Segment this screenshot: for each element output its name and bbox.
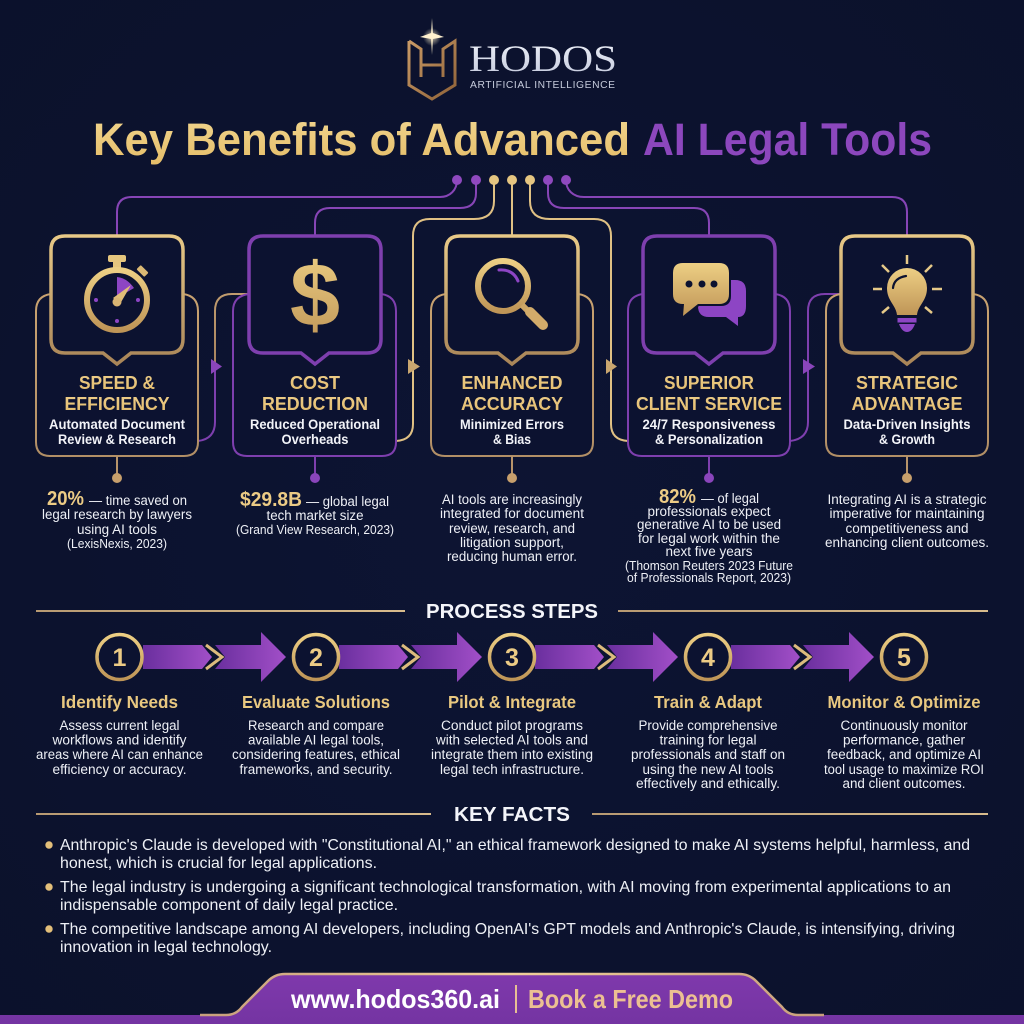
text block: strategic description — [825, 492, 989, 550]
step 1: identify needs: Assess current legal — [60, 718, 180, 733]
icon: shield with star — [409, 18, 455, 99]
fact 1: Anthropic's Claude is developed with "Constitutional AI," an ethical framework designed to make AI systems helpful, harmless, and — [60, 837, 970, 854]
card title: REDUCTION — [262, 393, 368, 414]
arrow: step 4 to 5 — [731, 632, 874, 682]
step 4: train and adapt: effectively and ethically. — [636, 776, 780, 791]
card title — [636, 372, 782, 414]
panel: superior client service — [628, 236, 790, 483]
arrow: step 1 to 2 — [143, 632, 286, 682]
text block: accuracy description: reducing human error. — [447, 549, 577, 564]
footer url: www.hodos360.ai — [290, 984, 500, 1014]
card subtitle: & Bias — [493, 432, 531, 447]
text block: 20% stat: using AI tools — [77, 522, 157, 537]
panel: cost reduction — [233, 236, 396, 483]
step 3: pilot and integrate: integrate them into existing — [431, 747, 593, 762]
step 2: evaluate solutions: frameworks, and security. — [240, 762, 392, 777]
panel: speed and efficiency — [36, 236, 198, 483]
text block: $29.8B stat: (Grand View Research, 2023) — [236, 522, 394, 537]
step 1: identify needs — [36, 634, 203, 777]
card subtitle: 24/7 Responsiveness — [642, 417, 776, 432]
icon: light bulb — [873, 255, 942, 332]
step 4: train and adapt: using the new AI tools — [642, 762, 774, 777]
text block: 20% stat: (LexisNexis, 2023) — [67, 536, 167, 551]
card subtitle: Data-Driven Insights — [844, 417, 970, 432]
text block: 82% stat: next five years — [666, 544, 753, 559]
logo wordmark: HODOS — [469, 39, 617, 80]
text block: strategic description: imperative for maintaining — [830, 506, 984, 521]
text block: 20% stat: — time saved on — [89, 493, 187, 508]
step 1: identify needs: efficiency or accuracy. — [52, 762, 186, 777]
text block: accuracy description — [440, 492, 584, 564]
text block: $29.8B stat — [236, 489, 394, 537]
step 5: monitor and optimize: feedback, and optimize AI — [827, 747, 981, 762]
step 5: monitor and optimize: tool usage to maximize ROI — [824, 762, 984, 777]
step 3: pilot and integrate — [431, 634, 593, 777]
step 2: evaluate solutions: Research and compare — [248, 718, 384, 733]
text block: 20% stat: legal research by lawyers — [42, 507, 192, 522]
step 3: pilot and integrate: with selected AI tools and — [435, 732, 588, 748]
card subtitle: Reduced Operational — [250, 417, 380, 432]
text block: 82% stat: 82% — [659, 486, 696, 508]
footer banner — [0, 974, 1024, 1024]
text block: $29.8B stat: $29.8B — [240, 489, 302, 511]
fact 3: innovation in legal technology. — [60, 939, 272, 956]
step 5: monitor and optimize: and client outcomes. — [842, 776, 966, 791]
process arrows — [143, 632, 874, 682]
title: AI Legal Tools — [643, 114, 932, 165]
card title: CLIENT SERVICE — [636, 393, 782, 414]
heading: key facts: KEY FACTS — [454, 803, 570, 826]
fact 2: indispensable component of daily legal practice. — [60, 897, 398, 914]
text block: accuracy description: AI tools are increasingly — [442, 492, 582, 507]
step 4: train and adapt: Provide comprehensive — [638, 718, 778, 733]
text block: accuracy description: litigation support, — [460, 535, 564, 550]
step 2: evaluate solutions: Evaluate Solutions — [242, 692, 390, 712]
text block: strategic description: Integrating AI is a strategic — [828, 492, 987, 507]
step 5: monitor and optimize: 5 — [897, 644, 911, 672]
card title: ACCURACY — [461, 393, 564, 414]
step 3: pilot and integrate: 3 — [505, 644, 519, 672]
icon: stopwatch — [87, 255, 149, 330]
text block: strategic description: enhancing client outcomes. — [825, 535, 989, 550]
card subtitle: Minimized Errors — [460, 417, 564, 432]
icon: chat bubbles — [671, 261, 746, 326]
fact 1: honest, which is crucial for legal applications. — [60, 855, 377, 872]
fact 2 — [45, 879, 951, 914]
step 2: evaluate solutions: 2 — [309, 644, 323, 672]
card subtitle — [460, 417, 564, 447]
step 5: monitor and optimize: performance, gather — [843, 732, 965, 748]
step 4: train and adapt: Train & Adapt — [654, 692, 762, 712]
arrow: card 2 to card 3 — [408, 359, 420, 374]
step 1: identify needs: 1 — [113, 644, 127, 672]
card title: SUPERIOR — [664, 372, 754, 393]
text block: 82% stat: professionals expect — [648, 504, 771, 519]
fact 3: The competitive landscape among AI developers, including OpenAI's GPT models and Anthropic's Claude, is intensifying, driving — [60, 921, 955, 938]
text block: strategic description: competitiveness and — [846, 521, 968, 536]
panel: strategic advantage — [826, 236, 988, 483]
step 4: train and adapt: training for legal — [660, 732, 756, 748]
arrow: card 1 to card 2 — [211, 359, 222, 374]
arrow: step 3 to 4 — [535, 632, 678, 682]
card title: ADVANTAGE — [852, 393, 962, 414]
card title — [64, 372, 170, 414]
icon: magnifying glass — [478, 261, 543, 325]
step 5: monitor and optimize: Monitor & Optimize — [828, 692, 981, 712]
text block: 20% stat — [42, 488, 192, 551]
step 3: pilot and integrate: Pilot & Integrate — [448, 692, 576, 712]
text block: $29.8B stat: — global legal — [306, 494, 389, 509]
card title — [852, 372, 962, 414]
step 1: identify needs: workflows and identify — [51, 732, 187, 748]
step 3: pilot and integrate: Conduct pilot programs — [441, 718, 583, 733]
card title: SPEED & — [79, 372, 155, 393]
card subtitle: Review & Research — [58, 432, 176, 447]
step 5: monitor and optimize — [824, 634, 984, 791]
key facts list — [45, 837, 970, 956]
text block: accuracy description: integrated for document — [440, 506, 584, 521]
title — [93, 114, 932, 165]
card title: EFFICIENCY — [64, 393, 170, 414]
step 2: evaluate solutions: available AI legal tools, — [248, 732, 384, 748]
logo tagline: ARTIFICIAL INTELLIGENCE — [470, 80, 615, 91]
card subtitle — [250, 417, 380, 447]
text block: 82% stat: (Thomson Reuters 2023 Future — [625, 558, 793, 573]
step 4: train and adapt: professionals and staff on — [631, 747, 785, 762]
footer call to action: Book a Free Demo — [528, 984, 733, 1014]
text block: 82% stat: of Professionals Report, 2023) — [627, 570, 791, 585]
step 5: monitor and optimize: Continuously monitor — [840, 718, 968, 733]
card title: STRATEGIC — [856, 372, 958, 393]
step 2: evaluate solutions: considering features, ethical — [232, 747, 400, 762]
card subtitle — [642, 417, 776, 447]
card title — [262, 372, 368, 414]
text block: 82% stat: for legal work within the — [638, 531, 780, 546]
fact 1 — [45, 837, 970, 872]
fact 3 — [45, 921, 955, 956]
heading: process steps: PROCESS STEPS — [426, 600, 598, 623]
text block: 82% stat: — of legal — [701, 491, 759, 506]
card subtitle — [49, 417, 185, 447]
title: Key Benefits of Advanced — [93, 114, 630, 165]
step 4: train and adapt: 4 — [701, 644, 715, 672]
text block: accuracy description: review, research, and — [449, 521, 575, 536]
step 1: identify needs: areas where AI can enhance — [36, 747, 203, 762]
card subtitle: & Growth — [879, 432, 935, 447]
arrow: step 2 to 3 — [339, 632, 482, 682]
card subtitle: & Personalization — [655, 432, 763, 447]
card title — [461, 372, 564, 414]
card subtitle — [844, 417, 970, 447]
step 3: pilot and integrate: legal tech infrastructure. — [440, 762, 584, 777]
logo: Hodos Artificial Intelligence — [409, 18, 617, 99]
card subtitle: Overheads — [282, 432, 348, 447]
connector wires from title to cards — [117, 175, 907, 441]
text block: $29.8B stat: tech market size — [266, 508, 364, 523]
arrow: card 4 to card 5 — [803, 359, 815, 374]
step 4: train and adapt — [631, 634, 785, 791]
panel: enhanced accuracy — [431, 236, 593, 483]
fact 2: The legal industry is undergoing a significant technological transformation, with AI moving from experimental applications to an — [60, 879, 951, 896]
text block: 20% stat: 20% — [47, 488, 84, 510]
step 2: evaluate solutions — [232, 634, 400, 777]
arrow: card 3 to card 4 — [606, 359, 617, 374]
card title: COST — [290, 372, 341, 393]
text block: 82% stat: generative AI to be used — [637, 517, 781, 532]
icon: dollar sign: $ — [290, 246, 340, 346]
step 1: identify needs: Identify Needs — [61, 692, 178, 712]
text block: 82% stat — [625, 486, 793, 585]
card subtitle: Automated Document — [49, 417, 185, 432]
card title: ENHANCED — [462, 372, 562, 393]
